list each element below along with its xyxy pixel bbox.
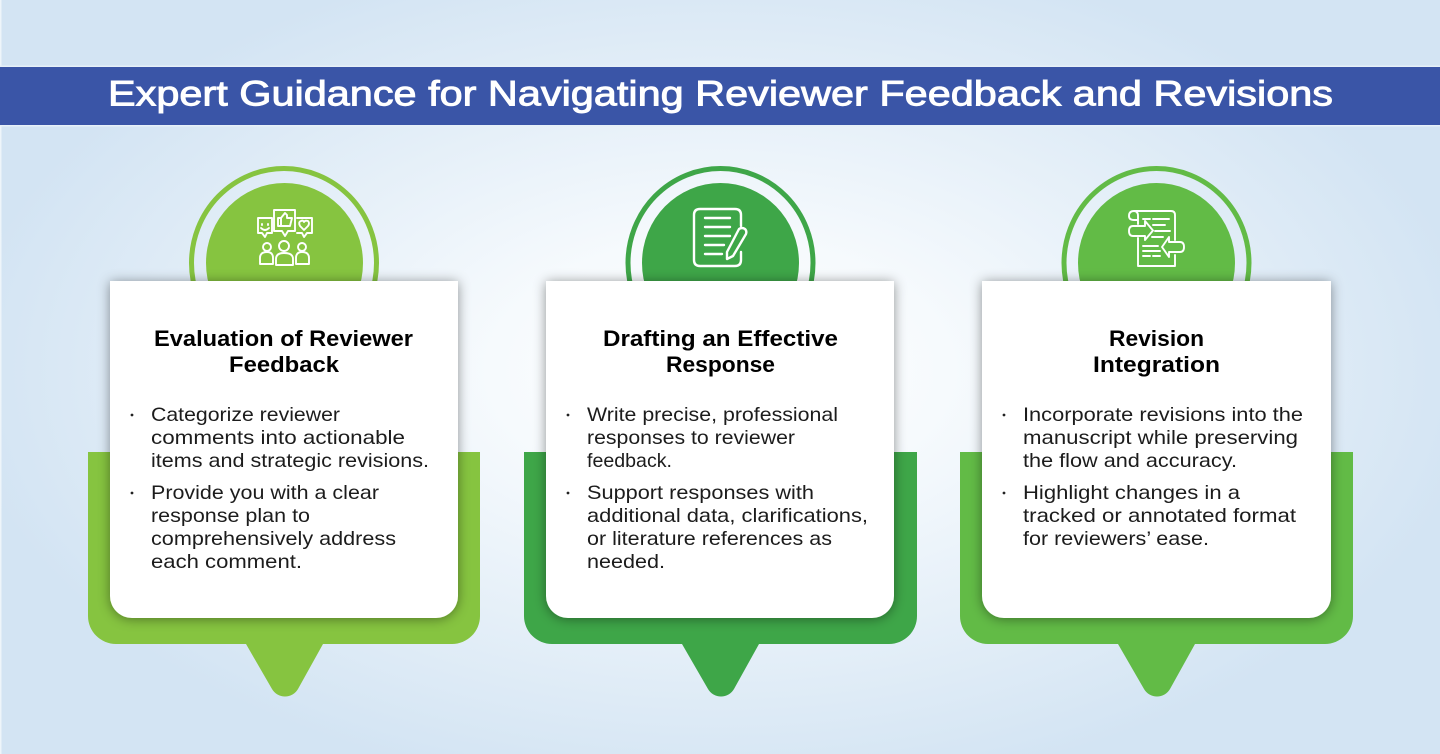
title: Expert Guidance for Navigating Reviewer Feedback and Revisions [108,74,1333,114]
bullet: response plan: Provide you with a clear [151,482,380,504]
heading [154,326,413,377]
green speech-bubble backing [524,452,917,697]
icon: document and pen [694,209,746,266]
bullet: incorporate revisions: Incorporate revisions into the [1023,404,1303,426]
bullet: response plan: comprehensively address [151,528,396,550]
green speech-bubble backing [88,452,480,697]
bullet: response plan: response plan to [151,505,310,527]
heading: Feedback [229,352,340,377]
bullet: highlight changes: for reviewers’ ease. [1023,528,1209,550]
panel: revision integration [960,168,1353,697]
bullet: categorize comments [131,404,429,472]
bullet: categorize comments: comments into actionable [151,427,405,449]
icon: feedback people [258,210,312,265]
heading: Integration [1093,352,1220,377]
heading: Drafting an Effective [603,326,838,351]
bullet: categorize comments: Categorize reviewer [151,404,341,426]
panel: evaluation of reviewer feedback [88,168,480,697]
title banner [0,67,1440,125]
white card [110,281,458,618]
bullet: response plan [131,482,396,573]
bullet: supporting data: Support responses with [587,482,814,504]
heading: Evaluation of Reviewer [154,326,413,351]
bullet: highlight changes: Highlight changes in a [1023,482,1240,504]
bullet: precise responses [567,404,838,472]
bullet: precise responses: feedback. [587,450,672,472]
icon: document with revision arrows [1129,211,1184,266]
icon circle with ring [628,168,813,358]
bullet: incorporate revisions [1003,404,1303,472]
white card [546,281,894,618]
bullet: supporting data: needed. [587,551,665,573]
bullet: supporting data: additional data, clarifications, [587,505,868,527]
bullet: response plan: each comment. [151,551,302,573]
heading: Revision [1109,326,1204,351]
bullet: highlight changes [1003,482,1297,550]
bullet: precise responses: Write precise, professional [587,404,838,426]
icon circle with ring [1064,168,1249,358]
bullet: precise responses: responses to reviewer [587,427,796,449]
bullet: supporting data: or literature references as [587,528,832,550]
icon circle with ring [192,168,376,358]
heading [1093,326,1220,377]
bullet: highlight changes: tracked or annotated format [1023,505,1297,527]
bullet: incorporate revisions: manuscript while preserving [1023,427,1298,449]
white card [982,281,1331,618]
heading: Response [666,352,775,377]
panel: drafting an effective response [524,168,917,697]
bullet: supporting data [567,482,868,573]
green speech-bubble backing [960,452,1353,697]
bullet: incorporate revisions: the flow and accuracy. [1023,450,1237,472]
heading [603,326,838,377]
bullet: categorize comments: items and strategic revisions. [151,450,429,472]
